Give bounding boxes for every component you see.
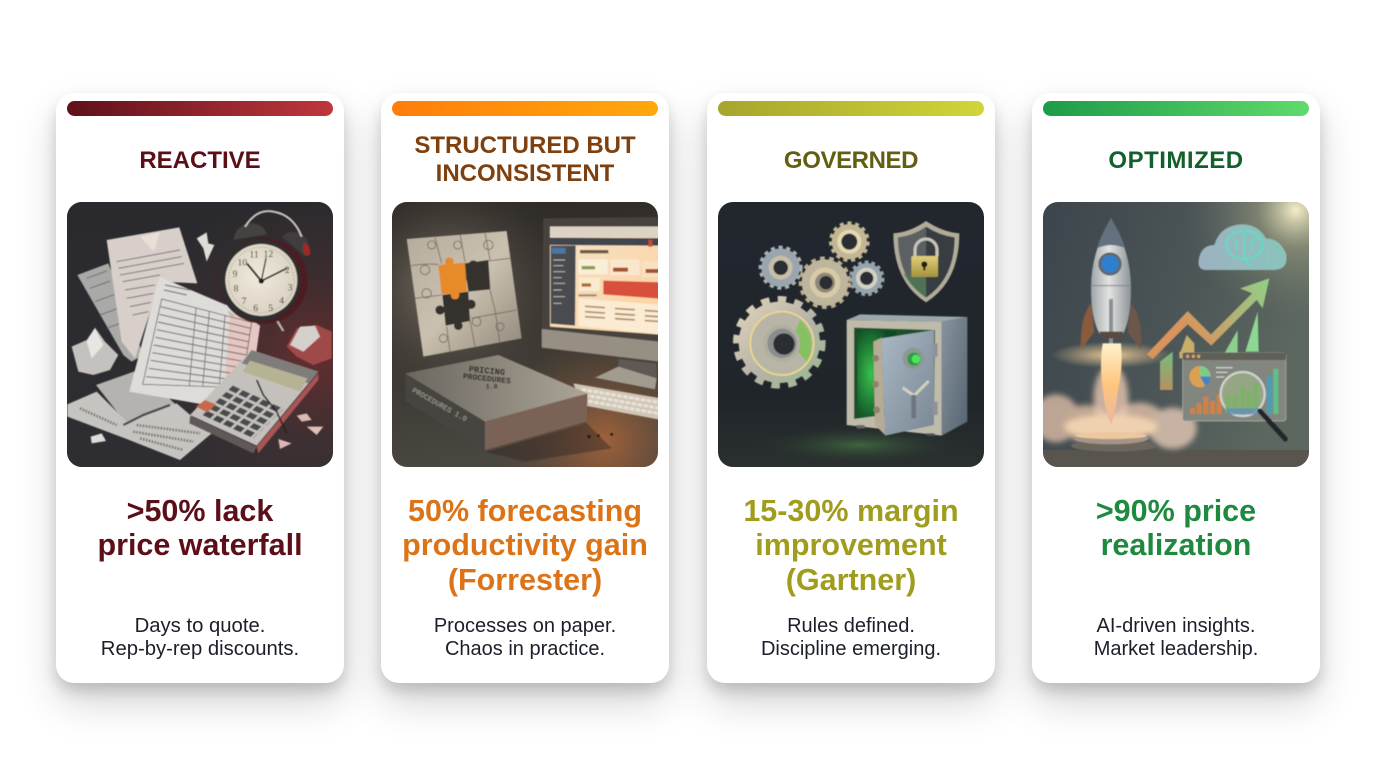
illustration: papers, alarm clock and broken calculator: 4 xyxy=(279,295,284,306)
heading: structured but inconsistent: STRUCTURED BUT xyxy=(414,132,636,158)
stat: lack price waterfall: >50% lack xyxy=(127,494,273,528)
stat: lack price waterfall xyxy=(97,494,303,562)
illustration: papers, alarm clock and broken calculator: 9 xyxy=(233,269,238,280)
description: structured: Processes on paper. xyxy=(434,615,616,637)
description: optimized xyxy=(1094,615,1258,660)
illustration: papers, alarm clock and broken calculator: 10 xyxy=(238,258,247,269)
illustration: puzzle, process book and dashboard xyxy=(392,202,658,467)
description: structured: Chaos in practice. xyxy=(445,638,605,660)
illustration: papers, alarm clock and broken calculator: 2 xyxy=(285,265,290,276)
stat: forecasting productivity gain xyxy=(402,494,648,597)
stat: lack price waterfall: price waterfall xyxy=(97,528,303,562)
illustration: papers, alarm clock and broken calculator: 5 xyxy=(268,303,273,314)
description: governed: Discipline emerging. xyxy=(761,638,941,660)
heading: reactive: REACTIVE xyxy=(139,147,261,174)
description: optimized: Market leadership. xyxy=(1094,638,1258,660)
heading: optimized: OPTIMIZED xyxy=(1108,147,1244,174)
illustration: puzzle, process book and dashboard: PROCEDURES xyxy=(462,373,511,387)
stat: margin improvement xyxy=(743,494,959,597)
illustration: papers, alarm clock and broken calculator: 6 xyxy=(253,303,258,314)
stat: forecasting productivity gain: 50% forecasting xyxy=(408,494,642,528)
stat: price realization xyxy=(1096,494,1256,562)
illustration: papers, alarm clock and broken calculator xyxy=(67,202,333,467)
color bar: governed xyxy=(718,101,984,116)
description: governed xyxy=(761,615,941,660)
description: reactive: Rep-by-rep discounts. xyxy=(101,638,299,660)
illustration: puzzle, process book and dashboard: PRICING xyxy=(468,364,505,378)
color bar: optimized xyxy=(1043,101,1309,116)
illustration: puzzle, process book and dashboard: 1.0 xyxy=(486,382,498,390)
panel: optimized xyxy=(1032,93,1320,683)
description: reactive: Days to quote. xyxy=(135,615,265,637)
illustration: papers, alarm clock and broken calculator: 8 xyxy=(234,284,239,295)
stat: forecasting productivity gain: productivity gain xyxy=(402,528,648,562)
color bar: structured xyxy=(392,101,658,116)
heading: structured but inconsistent: INCONSISTENT xyxy=(436,160,614,186)
stat: price realization: >90% price xyxy=(1096,494,1256,528)
panel: structured but inconsistent xyxy=(381,93,669,683)
color bar: reactive xyxy=(67,101,333,116)
stat: margin improvement: (Gartner) xyxy=(786,563,916,597)
illustration: rocket launch, AI cloud and growth charts xyxy=(1043,202,1309,467)
heading: structured but inconsistent xyxy=(414,132,636,186)
description: optimized: AI-driven insights. xyxy=(1097,615,1255,637)
illustration: puzzle, process book and dashboard: PROCEDURES 1.0 xyxy=(410,387,468,424)
illustration: gears, shield with lock and open safe xyxy=(718,202,984,467)
stat: forecasting productivity gain: (Forrester) xyxy=(448,563,602,597)
illustration: papers, alarm clock and broken calculator: 7 xyxy=(242,296,247,307)
heading: governed: GOVERNED xyxy=(784,147,918,174)
illustration: papers, alarm clock and broken calculator: 11 xyxy=(249,250,259,261)
illustration: papers, alarm clock and broken calculator: 12 xyxy=(264,249,273,260)
illustration: papers, alarm clock and broken calculator: 3 xyxy=(288,282,293,293)
description: structured xyxy=(434,615,616,660)
description: governed: Rules defined. xyxy=(787,615,915,637)
stat: margin improvement: improvement xyxy=(755,528,947,562)
panel: governed xyxy=(707,93,995,683)
stat: price realization: realization xyxy=(1101,528,1251,562)
panel: reactive xyxy=(56,93,344,683)
description: reactive xyxy=(101,615,299,660)
stat: margin improvement: 15-30% margin xyxy=(743,494,959,528)
